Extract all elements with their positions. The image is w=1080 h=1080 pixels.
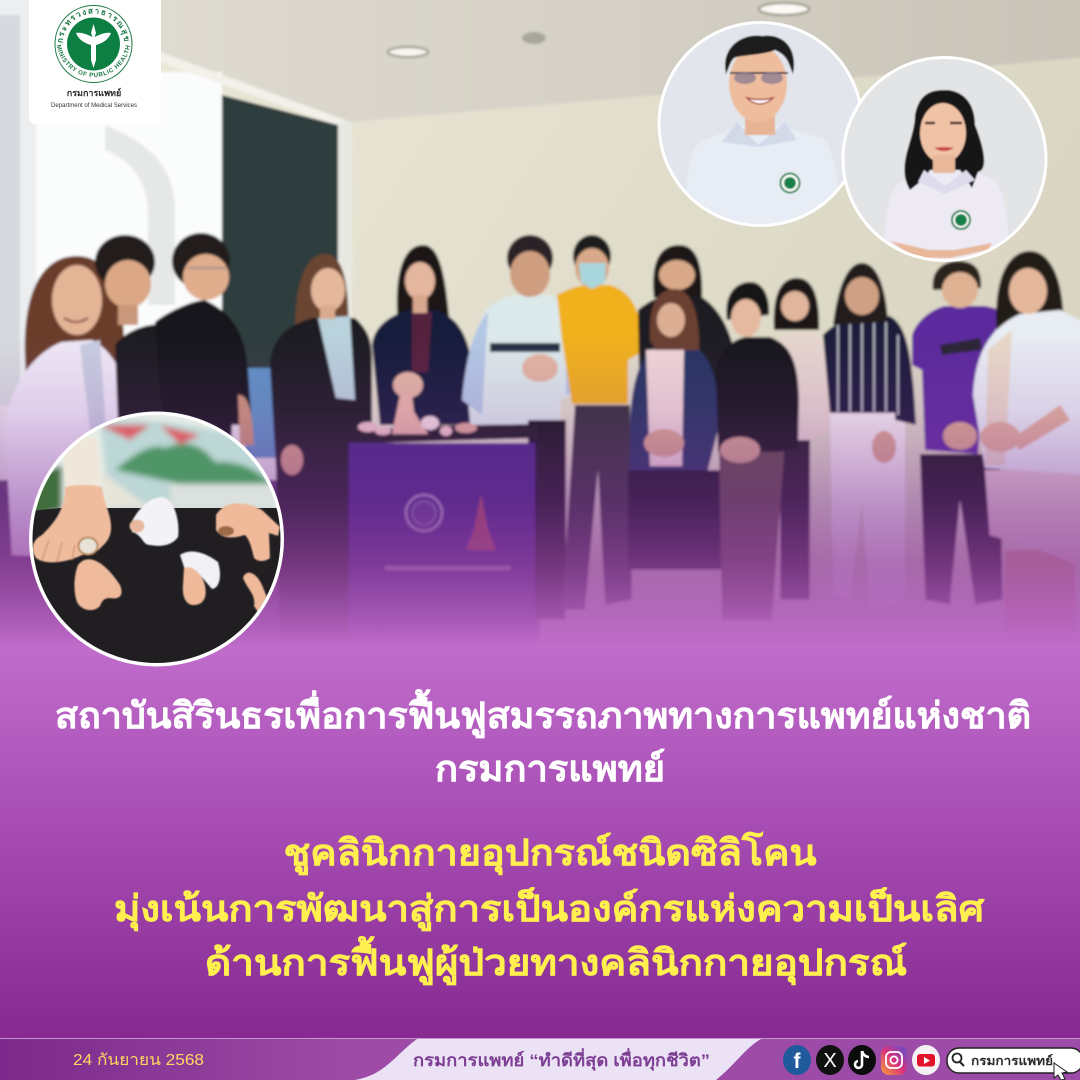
icon: facebook: f [794,1050,802,1073]
department thai name: กรมการแพทย์ [67,87,121,98]
person: woman in white coat and lace skirt [973,251,1080,660]
icon: X: X [823,1050,837,1072]
seal thai text: กระทรวงสาธารณสุข [58,8,129,43]
seal english text: MINISTRY OF PUBLIC HEALTH [56,44,130,77]
headline: institute name [55,689,1031,789]
toe prosthesis [74,559,122,610]
exhibition table with prostheses [345,395,538,444]
person: woman with glasses in navy cardigan [628,289,722,570]
footer slogan: กรมการแพทย์ “ทำดีที่สุด เพื่อทุกชีวิต” [413,1048,710,1071]
inset photo: silicone prostheses [29,412,284,666]
sub-headline line 3: ด้านการฟื้นฟูผู้ป่วยทางคลินิกกายอุปกรณ์ [205,936,907,986]
person: woman behind in black top [638,245,732,420]
seal thai arc path [62,13,124,50]
floor [0,480,540,700]
person: woman in black sweater [716,282,799,620]
ceiling lights [388,3,809,57]
background photo: team in room [0,0,1080,700]
headline line 1: สถาบันสิรินธรเพื่อการฟื้นฟูสมรรถภาพทางการแพทย์แห่งชาติ [55,689,1031,739]
person: short hair in black polo [95,235,195,480]
department english name: Department of Medical Services [51,103,137,109]
purple gradient overlay [0,300,1080,1080]
white cap finger [180,551,220,589]
purple banner with seals [349,443,535,658]
person: woman in purple polo [912,261,1003,605]
seal ring [55,6,132,82]
portrait: man in white shirt [658,21,860,227]
painting backdrop [34,415,277,519]
ceiling [150,0,1080,122]
footer date: 24 กันยายน 2568 [73,1052,204,1069]
window frame and blinds [0,0,352,485]
black table [32,508,280,663]
person: woman in beige top [771,278,835,600]
icon: TikTok [848,1045,876,1075]
footer slogan ribbon [355,1039,761,1080]
sub-headline line 1: ชูคลินิกกายอุปกรณ์ชนิดซิลิโคน [284,831,817,876]
small finger [243,573,268,612]
person: woman in navy blazer [372,245,474,425]
icon: Instagram [881,1046,907,1075]
search box: กรมการแพทย์ [971,1054,1053,1068]
person: older man in white vest [462,235,596,620]
sub-headline line 2: มุ่งเน้นการพัฒนาสู่การเป็นองค์กรแห่งความเป็นเลิศ [114,886,985,932]
person: man in yellow polo with mask [557,235,645,610]
foot prosthesis [33,437,280,612]
headline line 2: กรมการแพทย์ [435,748,665,789]
seal english arc path [56,40,130,77]
person: lab coat woman [5,256,135,560]
seal caduceus [76,24,111,68]
person: woman in striped shirt and white trousers [823,263,916,612]
person: young man with glasses [155,233,254,490]
sub-headline in yellow [114,831,985,986]
icon: YouTube [912,1045,940,1075]
room wall [0,0,1080,700]
search box [947,1048,1080,1073]
portrait: woman in white shirt [842,56,1048,262]
footer bar [0,1038,1080,1080]
finger prosthesis [216,503,280,561]
icon: X [816,1045,844,1075]
person: woman in black blazer [270,254,372,640]
white toe sleeve [130,497,178,546]
icon: facebook [783,1045,811,1075]
logo panel: Department of Medical Services [29,0,161,124]
seal centre [67,18,120,70]
icon: mouse cursor [1054,1063,1067,1080]
